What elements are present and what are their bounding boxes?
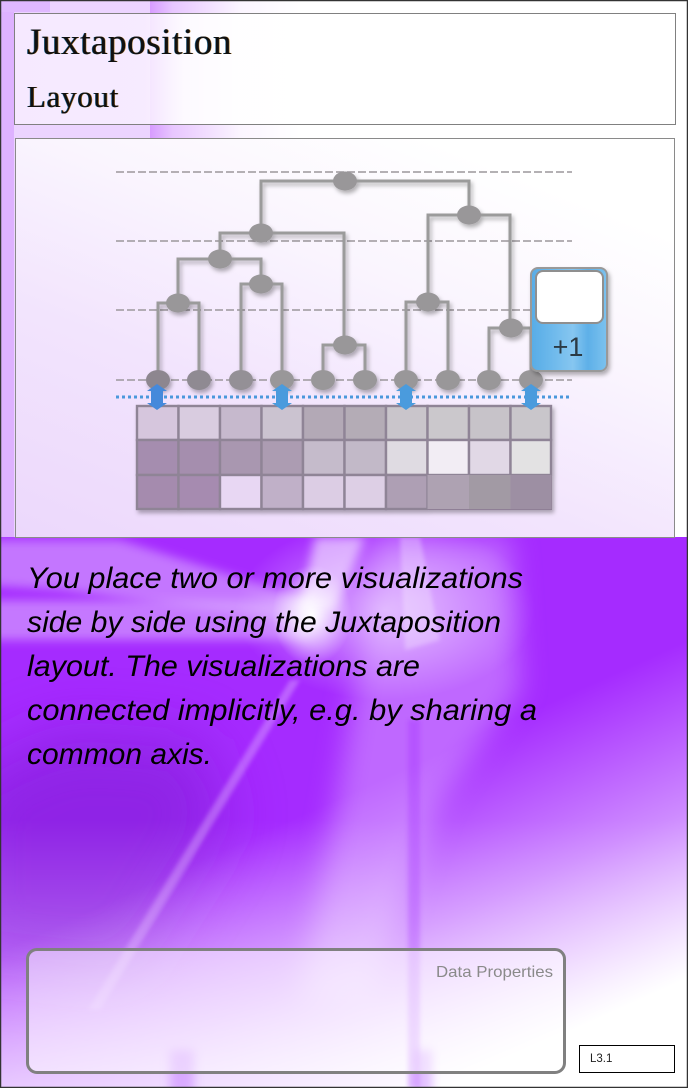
upper area fading to white <box>0 0 688 537</box>
dendrogram <box>146 172 543 390</box>
heading: Juxtaposition: Juxtaposition <box>27 22 232 63</box>
guide lines <box>116 172 572 380</box>
score card +1: +1 <box>553 332 583 362</box>
body text: common axis. <box>27 738 212 771</box>
dotted axis <box>116 396 570 398</box>
body text: side by side using the Juxtaposition <box>27 606 501 639</box>
label: Data Properties: Data Properties <box>436 964 553 981</box>
panel: data properties <box>26 948 566 1074</box>
body text: connected implicitly, e.g. by sharing a <box>27 694 537 727</box>
card id label: L3.1 <box>590 1053 612 1065</box>
panel: title <box>14 13 676 125</box>
double arrows <box>147 384 541 410</box>
subheading: Layout: Layout <box>27 79 119 114</box>
panel: dendrogram and heat map <box>15 138 675 538</box>
body text: layout. The visualizations are <box>27 650 420 683</box>
lower body <box>0 520 688 1088</box>
body text: You place two or more visualizations <box>27 562 523 595</box>
score card +1 <box>531 268 607 371</box>
heat map <box>136 405 552 510</box>
card id label <box>579 1045 675 1073</box>
